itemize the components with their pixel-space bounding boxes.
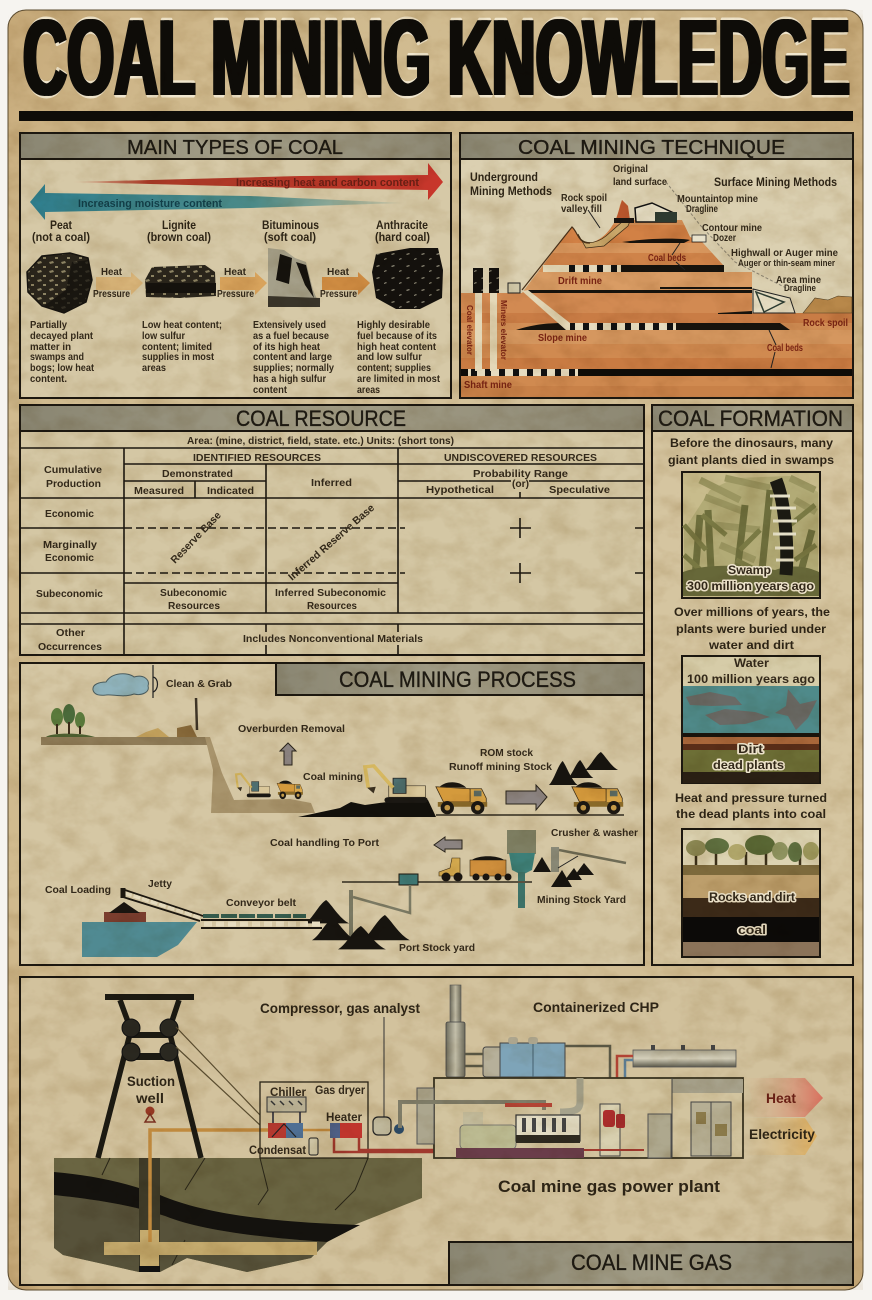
panel: main types of coal <box>20 133 451 398</box>
arrows heat and pressure: Pressure <box>93 288 130 300</box>
small excavator <box>236 774 271 797</box>
technique labels: Coal beds <box>767 342 803 354</box>
rock and coal labels: coal <box>738 923 766 937</box>
text: formation step one: Before the dinosaurs, many <box>670 436 833 450</box>
pit wall <box>205 737 315 813</box>
exhaust tank <box>617 1045 736 1125</box>
gas diagram labels <box>127 999 815 1196</box>
haul train <box>439 856 512 882</box>
text: bituminous description: content and large <box>253 351 332 363</box>
shaft tunnel <box>468 369 578 376</box>
resource table labels: Subeconomic <box>160 587 227 599</box>
mine cross-section diagram <box>461 182 853 398</box>
resource table labels: Inferred Reserve Base <box>286 502 377 583</box>
text: bituminous description: Extensively used <box>253 319 326 331</box>
text: bituminous description: as a fuel because <box>253 330 329 342</box>
text: formation step one: giant plants died in swamps <box>668 453 834 467</box>
arrows heat and pressure <box>93 266 370 300</box>
coal type labels: (brown coal) <box>147 230 211 244</box>
process labels: Clean & Grab <box>166 678 232 690</box>
coal type labels: (hard coal) <box>375 230 430 244</box>
text: bituminous description: content <box>253 384 287 396</box>
technique labels: Area mine <box>776 274 821 286</box>
coal type labels <box>32 218 430 244</box>
coal type labels: (not a coal) <box>32 230 90 244</box>
technique labels <box>464 163 848 391</box>
gas pipe <box>150 1130 330 1242</box>
heading: coal resource <box>20 405 644 431</box>
gas diagram labels: Gas dryer <box>315 1083 365 1097</box>
icon: cloud and marker <box>93 665 158 698</box>
text: bituminous description: supplies; normally <box>253 362 334 374</box>
ship with coal <box>82 902 197 957</box>
process labels: Port Stock yard <box>399 942 475 954</box>
ground line <box>436 814 624 816</box>
gas treatment box <box>260 1082 368 1158</box>
technique labels: Coal elevator <box>465 305 475 356</box>
water and dirt labels: 100 million years ago <box>687 672 815 686</box>
arrows heat and pressure: Heat <box>327 266 349 278</box>
transfer tower <box>349 874 418 937</box>
resource table labels: Includes Nonconventional Materials <box>243 633 423 645</box>
icon: bituminous <box>268 248 320 307</box>
technique labels: Original <box>613 163 648 175</box>
radiator unit <box>465 1037 610 1125</box>
process labels: Jetty <box>148 878 172 890</box>
text: formation step three: Heat and pressure turned <box>675 791 827 805</box>
resource table labels: Indicated <box>207 485 254 497</box>
gas diagram labels: well <box>135 1090 164 1106</box>
slope shaft <box>522 290 570 330</box>
dozer <box>692 235 706 242</box>
gas diagram labels: Compressor, gas analyst <box>260 1000 420 1016</box>
resource table grid <box>20 448 644 654</box>
text: peat description: bogs; low heat <box>30 362 94 374</box>
water and dirt labels: dead plants <box>713 758 784 772</box>
text: formation step two: plants were buried under <box>676 622 826 636</box>
heading: coal mining technique: COAL MINING TECHNIQUE <box>518 137 785 159</box>
process labels: Overburden Removal <box>238 723 345 735</box>
resource table labels: Measured <box>134 485 184 497</box>
technique labels: Auger or thin-seam miner <box>738 258 835 268</box>
arrows heat and pressure: Heat <box>101 266 122 278</box>
small truck <box>277 781 303 799</box>
text: lignite description: areas <box>142 362 166 374</box>
coal type labels: Bituminous <box>262 218 319 232</box>
text: anthracite description <box>357 319 440 396</box>
technique labels: valley fill <box>561 203 602 215</box>
arrow: moisture: Increasing moisture content <box>78 198 222 210</box>
resource table labels: Production <box>46 478 101 490</box>
technique labels: Slope mine <box>538 332 587 344</box>
process labels: Coal Loading <box>45 884 111 896</box>
process labels: Coal handling To Port <box>270 837 380 849</box>
process labels: Runoff mining Stock <box>449 761 552 773</box>
swamp labels: 300 million years ago <box>687 579 814 593</box>
arrows heat and pressure: Heat <box>224 266 246 278</box>
resource table labels: Economic <box>45 508 94 520</box>
top dragline <box>635 203 676 222</box>
red return pipes <box>334 1138 640 1152</box>
process labels: Conveyor belt <box>226 897 297 909</box>
truck one <box>436 782 487 814</box>
port stockpiles <box>305 900 410 949</box>
technique labels: Drift mine <box>558 275 602 287</box>
compressor <box>373 1017 404 1135</box>
gas diagram labels: Electricity <box>749 1126 815 1142</box>
process labels: ROM stock <box>480 747 533 759</box>
jetty <box>123 888 203 921</box>
swamp labels <box>687 563 814 593</box>
coal type labels: Peat <box>50 218 72 232</box>
technique labels: Dozer <box>713 232 736 244</box>
resource table labels: Cumulative <box>44 464 102 476</box>
coal type labels: Anthracite <box>376 218 428 232</box>
crusher and stock yard <box>533 847 626 887</box>
technique labels: Mining Methods <box>470 184 552 198</box>
text: bituminous description: of its high heat <box>253 341 320 353</box>
text: peat description: swamps and <box>30 351 84 363</box>
resource table labels: (or) <box>512 478 529 490</box>
text: anthracite description: are limited in most <box>357 373 440 385</box>
resource table labels: Resources <box>168 600 220 612</box>
technique labels: Miners elevator <box>499 300 509 361</box>
text: anthracite description: Highly desirable <box>357 319 430 331</box>
process labels <box>45 678 638 954</box>
text: formation step two <box>674 605 830 652</box>
text: lignite description: Low heat content; <box>142 319 222 331</box>
technique labels: Dragline <box>784 283 816 293</box>
icon: peat <box>27 253 92 313</box>
text: formation step two: water and dirt <box>708 638 794 652</box>
heading: coal mining process <box>276 663 644 695</box>
coal seam floor <box>298 800 436 817</box>
text: anthracite description: fuel because of its <box>357 330 437 342</box>
resource table labels: Probability Range <box>473 468 568 480</box>
headframe tower <box>98 994 260 1158</box>
gas diagram labels: Coal mine gas power plant <box>498 1177 720 1196</box>
crusher hopper <box>507 830 536 908</box>
text: anthracite description: content; supplies <box>357 362 431 374</box>
text: formation step one <box>668 436 834 467</box>
technique labels: Rock spoil <box>803 317 848 329</box>
resource table labels: Inferred Subeconomic <box>275 587 386 599</box>
big excavator <box>365 766 428 803</box>
text: peat description: matter in <box>30 341 71 353</box>
top bench with trees and rig <box>41 698 209 745</box>
rom stockpiles <box>549 752 618 785</box>
gas diagram labels: Heat <box>766 1090 796 1106</box>
resource table labels: Other <box>56 627 85 639</box>
panel: coal mine gas <box>20 977 853 1285</box>
chimney <box>446 985 465 1077</box>
process labels: Crusher & washer <box>551 827 638 839</box>
conveyor belt <box>201 916 322 928</box>
icon: lignite <box>145 265 216 298</box>
text: lignite description: supplies in most <box>142 351 214 363</box>
heading: main types of coal: MAIN TYPES OF COAL <box>127 137 343 159</box>
technique labels: Coal beds <box>648 252 686 264</box>
water and dirt labels: Water <box>734 656 769 670</box>
heading: coal mine gas <box>449 1242 853 1285</box>
gas diagram labels: Chiller <box>270 1085 306 1099</box>
drift tunnel <box>543 265 575 272</box>
right dragline pit <box>753 289 795 313</box>
coal type labels: Lignite <box>162 218 196 232</box>
technique labels: Rock spoil <box>561 192 607 204</box>
technique labels: land surface <box>613 176 667 188</box>
resource table labels: Hypothetical <box>426 484 494 496</box>
heading: coal mining technique <box>460 133 853 159</box>
rail line <box>342 881 532 883</box>
resource table labels: Reserve Base <box>169 509 224 566</box>
resource table labels: Area: (mine, district, field, state. etc.) Units: (short tons) <box>187 435 454 447</box>
technique labels: Shaft mine <box>464 379 512 391</box>
coal type labels: (soft coal) <box>264 230 316 244</box>
technique labels: Dragline <box>686 203 718 215</box>
text: anthracite description: high heat content <box>357 341 436 353</box>
arrow: heat output <box>745 1078 823 1117</box>
text: formation step two: Over millions of years, the <box>674 605 830 619</box>
water and dirt labels: Dirt <box>738 742 763 756</box>
heading: coal mine gas: COAL MINE GAS <box>571 1250 732 1275</box>
heading: coal resource: COAL RESOURCE <box>236 406 406 431</box>
illustration: water and dirt <box>682 656 820 783</box>
arrows heat and pressure: Pressure <box>217 288 254 300</box>
text: peat description: decayed plant <box>30 330 93 342</box>
technique labels: Highwall or Auger mine <box>731 247 838 259</box>
text: lignite description: content; limited <box>142 341 212 353</box>
text: bituminous description: has a high sulfur <box>253 373 326 385</box>
text: formation step three: the dead plants into coal <box>676 807 826 821</box>
icon: anthracite <box>372 248 443 309</box>
process labels: Mining Stock Yard <box>537 894 626 906</box>
panel: coal formation <box>652 405 853 965</box>
heading: coal formation: COAL FORMATION <box>658 406 843 431</box>
text: peat description <box>30 319 94 385</box>
truck two <box>572 782 623 814</box>
resource table labels: Demonstrated <box>162 468 233 480</box>
gas diagram labels: Suction <box>127 1073 175 1089</box>
process labels: Coal mining <box>303 771 363 783</box>
rock strata <box>461 195 853 398</box>
resource table labels: Subeconomic <box>36 588 103 600</box>
heading: coal mining process: COAL MINING PROCESS <box>339 667 576 692</box>
callout lines <box>666 182 790 290</box>
illustration: rocks and coal <box>682 829 820 957</box>
resource table labels: Marginally <box>43 539 97 551</box>
resource table labels: Occurrences <box>38 641 102 653</box>
rock spoil mounds <box>803 296 852 313</box>
panel: coal mining technique <box>460 133 853 398</box>
underground cross-section <box>54 1158 422 1272</box>
resource table labels: Speculative <box>549 484 610 496</box>
panel: coal resource <box>20 405 644 655</box>
arrow up <box>280 743 296 765</box>
text: bituminous description <box>253 319 334 396</box>
text: peat description: content. <box>30 373 67 385</box>
CHP container <box>400 1078 743 1158</box>
gas diagram labels: Containerized CHP <box>533 999 659 1015</box>
resource table labels: Inferred <box>311 477 352 489</box>
resource table labels: UNDISCOVERED RESOURCES <box>444 452 597 464</box>
arrow right <box>506 785 547 810</box>
title rule <box>19 111 853 121</box>
rock and coal labels <box>709 890 795 937</box>
coal beds <box>516 239 790 330</box>
text: anthracite description: areas <box>357 384 380 396</box>
arrows heat and pressure: Pressure <box>320 288 357 300</box>
swamp labels: Swamp <box>728 563 771 577</box>
elevators <box>475 293 482 371</box>
technique labels: Contour mine <box>702 222 762 234</box>
panel: coal mining process <box>20 663 644 965</box>
arrow left <box>434 837 462 852</box>
technique labels: Mountaintop mine <box>677 193 758 205</box>
text: formation step three <box>675 791 827 821</box>
technique labels: Underground <box>470 170 538 184</box>
arrow: heat and carbon <box>73 163 443 200</box>
heading: main types of coal <box>20 133 451 159</box>
arrow: heat and carbon: Increasing heat and carbon content <box>236 177 419 189</box>
illustration: swamp <box>682 472 820 598</box>
resource table labels: IDENTIFIED RESOURCES <box>193 452 321 464</box>
valley fill <box>578 221 630 248</box>
icon: suction well head <box>145 1106 155 1122</box>
arrow: electricity output <box>745 1118 817 1155</box>
arrow: moisture <box>30 184 403 220</box>
resource table labels: Economic <box>45 552 94 564</box>
resource table labels: Resources <box>307 600 357 612</box>
technique labels: Surface Mining Methods <box>714 175 837 189</box>
resource table labels <box>36 435 610 653</box>
text: peat description: Partially <box>30 319 67 331</box>
rock and coal labels: Rocks and dirt <box>709 890 795 904</box>
water and dirt labels <box>687 656 815 772</box>
gas diagram labels: Heater <box>326 1110 362 1124</box>
text: lignite description: low sulfur <box>142 330 185 342</box>
gas diagram labels: Condensat <box>249 1143 306 1157</box>
text: lignite description <box>142 319 222 374</box>
text: anthracite description: and low sulfur <box>357 351 422 363</box>
